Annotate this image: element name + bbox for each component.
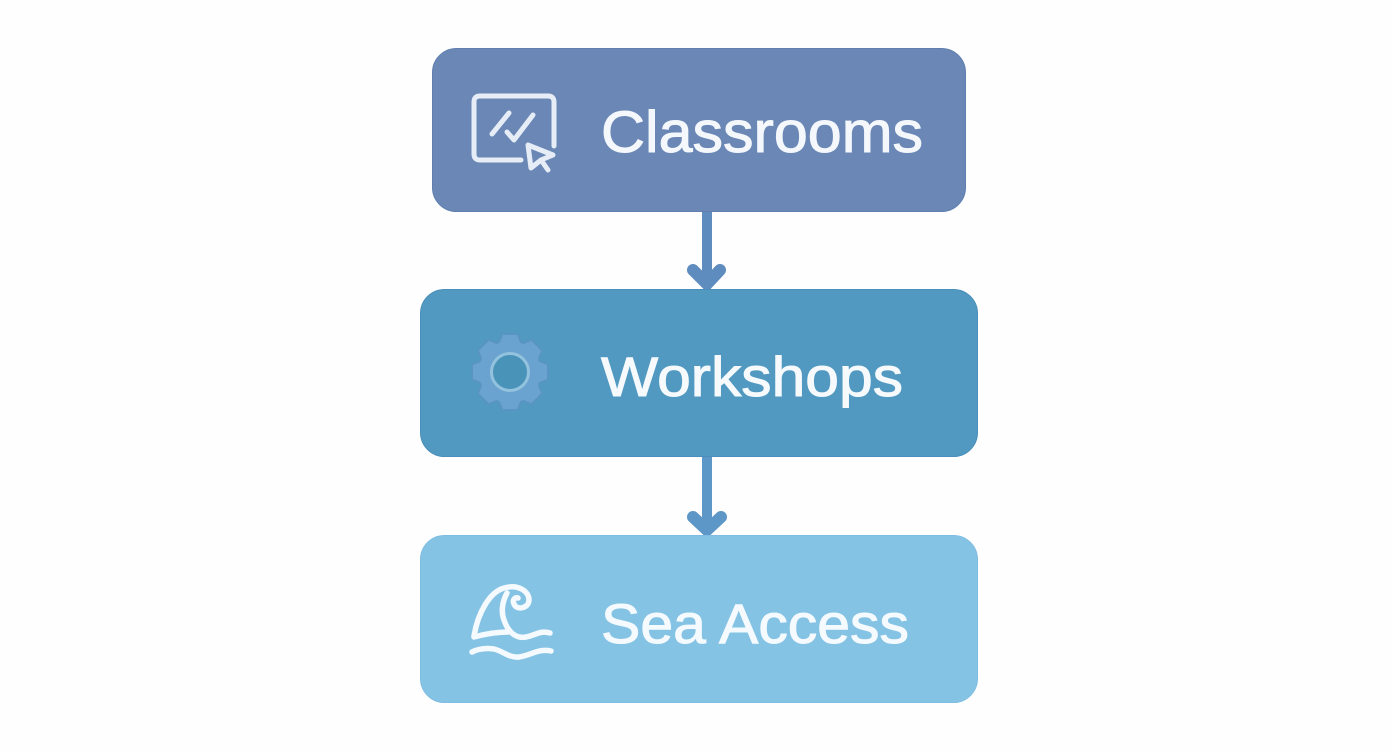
icon: gear xyxy=(473,335,547,409)
arrow: workshops to sea access xyxy=(693,454,721,530)
panel: sea access xyxy=(420,536,978,702)
icon: presentation screen with cursor xyxy=(474,96,554,170)
box: classrooms xyxy=(432,48,966,212)
label: classrooms: Classrooms xyxy=(601,100,923,165)
label: workshops: Workshops xyxy=(601,345,903,408)
label: sea access: Sea Access xyxy=(601,592,909,655)
panel: workshops xyxy=(420,290,978,456)
box: workshops xyxy=(420,290,978,456)
panel: classrooms xyxy=(432,48,966,212)
box: sea access xyxy=(420,536,978,702)
icon: wave xyxy=(472,587,551,657)
arrow: classrooms to workshops xyxy=(693,208,720,284)
